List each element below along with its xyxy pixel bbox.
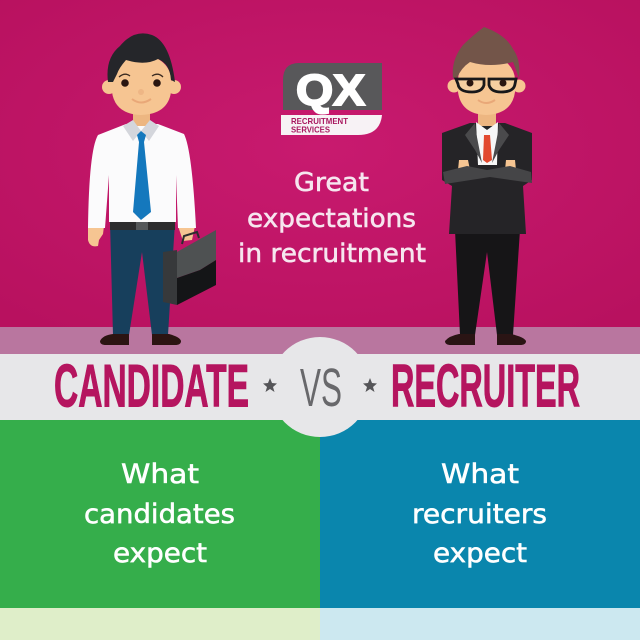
floor band	[0, 327, 640, 355]
head	[112, 52, 171, 115]
logo	[281, 63, 382, 135]
recruiters heading: What	[441, 459, 519, 490]
neck	[133, 110, 150, 126]
glasses	[456, 79, 516, 92]
mouth	[132, 99, 151, 102]
bottom strip: recruiters	[320, 608, 640, 640]
logo subtitle: SERVICES	[291, 124, 330, 134]
candidates heading: expect	[113, 538, 207, 569]
icon: briefcase	[163, 230, 216, 305]
recruiters heading: recruiters	[412, 499, 547, 530]
candidates heading: What	[121, 459, 199, 490]
background panel	[0, 0, 640, 328]
head	[458, 50, 515, 115]
candidate label: CANDIDATE	[54, 352, 249, 420]
trousers	[110, 222, 175, 335]
versus circle	[270, 337, 370, 437]
title: expectations	[247, 204, 416, 234]
eyes	[466, 80, 474, 86]
icon: left star	[263, 378, 277, 392]
versus banner	[0, 354, 640, 420]
title: Great	[294, 168, 369, 198]
hands	[458, 160, 470, 170]
lapels	[465, 123, 482, 163]
trousers	[455, 230, 520, 335]
eyes	[121, 79, 129, 87]
belt	[110, 222, 175, 230]
ears	[448, 80, 460, 92]
hair	[108, 33, 175, 82]
ears	[102, 80, 116, 94]
tie	[133, 131, 151, 220]
versus text: VS	[300, 358, 342, 418]
neck	[478, 110, 496, 126]
collar	[123, 120, 159, 141]
recruiter figure	[442, 27, 532, 345]
hands	[88, 226, 104, 246]
hair	[453, 27, 519, 78]
crossed arms	[443, 166, 532, 184]
shoes	[100, 334, 129, 345]
candidates heading: candidates	[84, 499, 235, 530]
logo subtitle: RECRUITMENT	[291, 116, 349, 126]
shirt	[88, 124, 196, 228]
recruiters heading: expect	[433, 538, 527, 569]
mouth	[478, 100, 495, 103]
shoes	[445, 334, 475, 345]
candidate figure	[88, 33, 196, 345]
icon: right star	[363, 378, 377, 392]
jacket	[442, 123, 532, 234]
title: in recruitment	[238, 239, 426, 269]
bottom strip: candidates	[0, 608, 320, 640]
shirt	[476, 122, 498, 165]
logo letters: QX	[296, 66, 365, 115]
panel: candidates	[0, 420, 320, 608]
panel: recruiters	[320, 420, 640, 608]
tie	[483, 135, 492, 163]
